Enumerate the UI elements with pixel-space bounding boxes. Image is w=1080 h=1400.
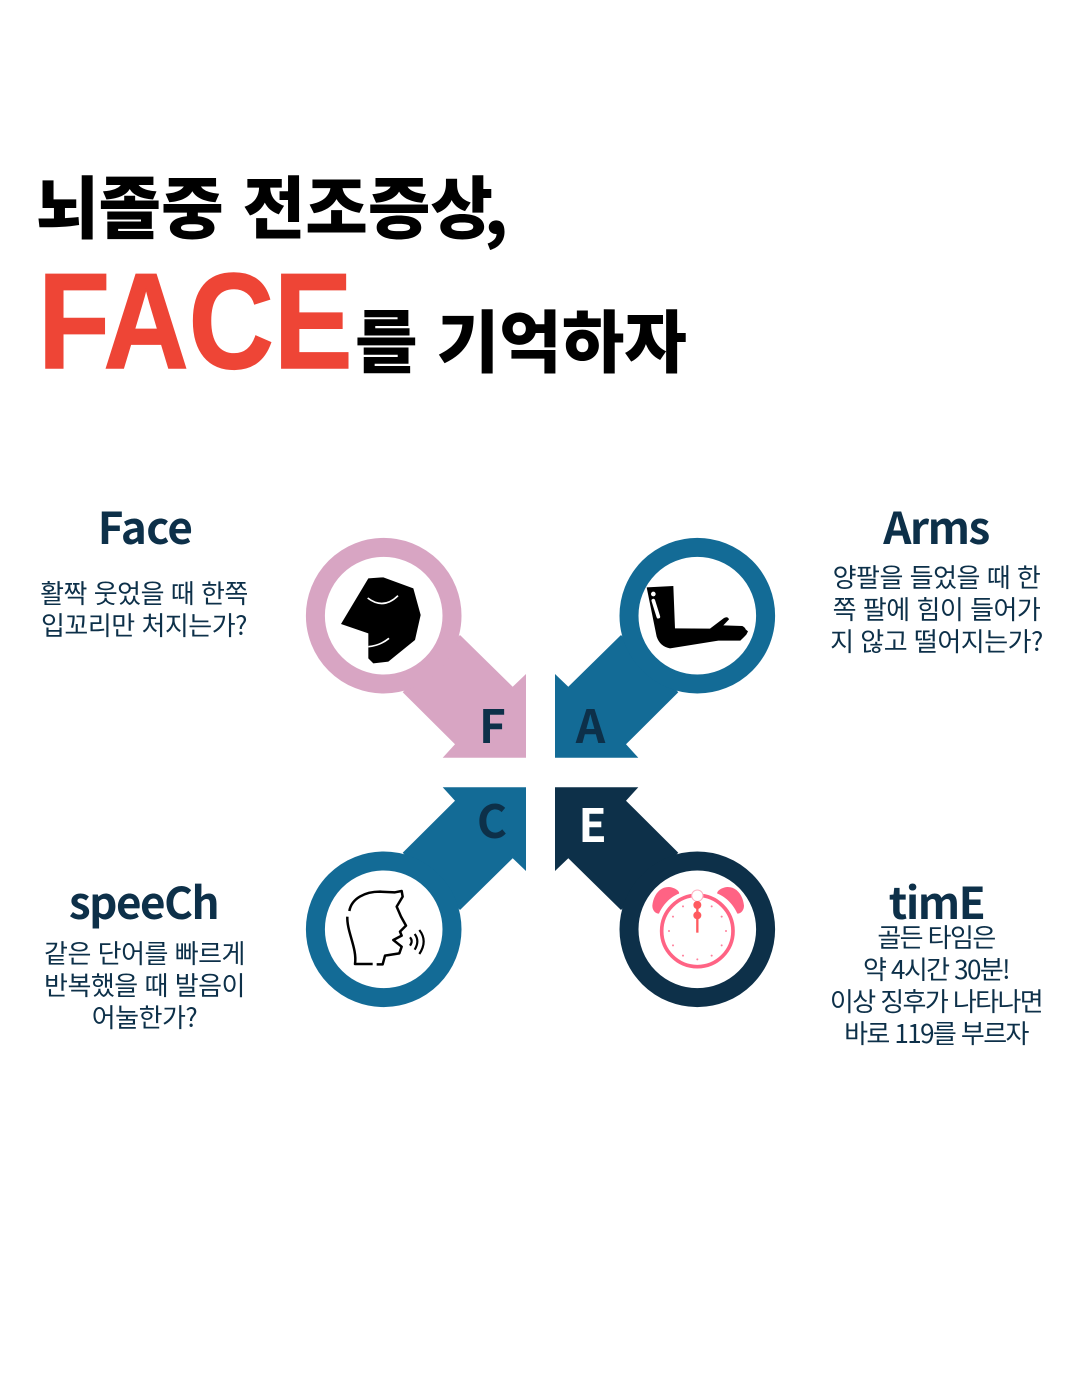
icon: raised arm [647,586,748,648]
title line 2: 를 기억하자 [355,288,687,387]
icon: alarm clock [652,887,744,967]
letter A: A [575,691,606,757]
text: speeCh description: 같은 단어를 빠르게 [44,934,245,971]
text: Arms description: 쪽 팔에 힘이 들어가 [833,590,1040,627]
panel: C arrow [315,786,526,998]
heading: Arms: Arms [883,493,989,557]
text: Face description: 활짝 웃었을 때 한쪽 [40,574,248,611]
title line 1: 뇌졸중 전조증상, [36,154,508,253]
text: Arms description: 양팔을 들었을 때 한 [833,558,1040,595]
letter E: E [578,790,607,856]
text: timE description: 바로 119를 부르자 [844,1014,1028,1051]
text: Face description [40,574,248,643]
text: Arms description [830,558,1043,659]
text: speeCh description: 반복했을 때 발음이 [44,966,245,1003]
letter F: F [479,691,506,757]
title accent: FACE: FACE [38,245,352,397]
text: speeCh description [44,934,245,1035]
heading: Face: Face [98,493,192,557]
text: timE description: 약 4시간 30분! [863,950,1009,987]
text: timE description: 골든 타임은 [877,918,995,955]
text: Arms description: 지 않고 떨어지는가? [830,622,1043,659]
text: timE description [830,918,1042,1051]
text: speeCh description: 어눌한가? [92,998,197,1035]
panel: E arrow [555,787,766,998]
heading: timE: timE [889,868,984,932]
panel: F arrow [315,547,526,758]
heading: speeCh: speeCh [69,868,218,932]
panel: A arrow [555,547,766,758]
letter C: C [477,786,507,852]
icon: smiling face profile [341,577,421,663]
text: Face description: 입꼬리만 처지는가? [41,606,247,643]
text: timE description: 이상 징후가 나타나면 [830,982,1042,1019]
icon: speaking head [347,891,424,964]
